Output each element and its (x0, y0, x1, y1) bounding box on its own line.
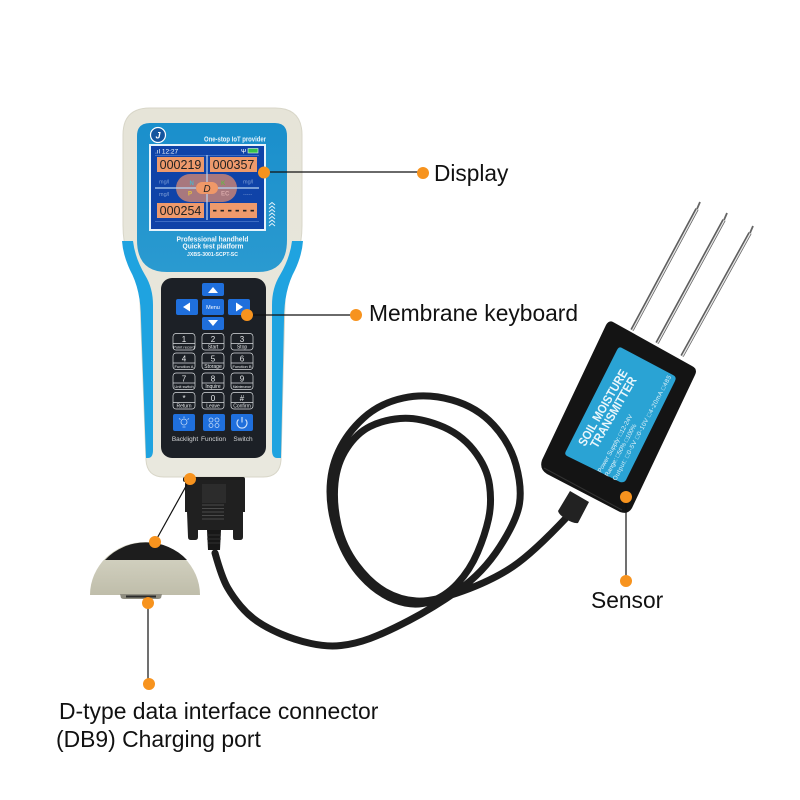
key legends: 1 (182, 335, 187, 344)
key legends: Function A (175, 364, 194, 369)
key legends: 0 (211, 394, 216, 403)
sensor title: TRANSMITTER (587, 374, 640, 450)
callout: membrane keyboard: Membrane keyboard (369, 300, 578, 326)
platform text: JXBS-3001-SCPT-SC (187, 252, 238, 258)
blue face panel (137, 123, 287, 272)
screen: .ıl 12:27 (155, 148, 179, 156)
number keys (173, 334, 253, 409)
screen: mg/l (243, 180, 253, 186)
key legends: Stop (237, 344, 247, 350)
screen: N (190, 181, 194, 187)
platform text (176, 234, 249, 258)
callout: membrane keyboard (241, 300, 578, 326)
platform text: Professional handheld (176, 234, 249, 244)
screen: EC (221, 192, 230, 198)
device body (123, 108, 302, 477)
connector detail inset (90, 542, 200, 599)
screen: mg/l (159, 192, 169, 198)
platform text: Quick test platform (182, 242, 244, 250)
key legends: Maintenance (233, 385, 251, 389)
key legends: Point record (173, 344, 195, 350)
screen: 000219 (160, 158, 201, 172)
callout: sensor (591, 491, 664, 613)
function keys: Backlight (172, 436, 198, 443)
function keys: Function (201, 436, 226, 443)
navigation keys (176, 283, 250, 330)
sensor title: SOIL MOISTURE (575, 367, 631, 448)
sensor label (565, 347, 676, 482)
strain relief (558, 491, 589, 523)
callout: sensor: Sensor (591, 587, 664, 613)
key legends: * (182, 394, 186, 403)
key legends: Return (176, 404, 192, 410)
handheld device (122, 108, 303, 477)
DB9 connector (183, 477, 245, 550)
key legends: Start (208, 344, 219, 350)
readings (157, 157, 204, 172)
callout: D-type data interface connector (56, 597, 379, 752)
key legends: Leave (206, 404, 220, 410)
key legends: 5 (211, 354, 216, 364)
function keys: Switch (233, 436, 253, 443)
sensor specs: Power Supply: □12-24V (597, 413, 635, 474)
callout: D-type data interface connector: D-type data interface connector (59, 698, 379, 724)
screen: ------ (212, 202, 254, 218)
screen: ----- (243, 192, 252, 198)
key legends: 4 (182, 354, 187, 364)
screen: 000254 (160, 204, 201, 218)
key legends: 3 (240, 335, 245, 344)
callout: connector leader (149, 473, 196, 548)
chevrons (269, 202, 275, 226)
sensor specs: Output: □0-5V □0-10V □4-20mA □485 (612, 374, 673, 482)
sensor housing (541, 321, 696, 513)
membrane keyboard (161, 278, 266, 458)
key legends: # (240, 394, 245, 403)
key legends: 8 (211, 374, 216, 384)
screen: P (188, 192, 192, 198)
navigation keys: Menu (206, 305, 220, 311)
key legends: Function B (232, 364, 252, 369)
callout: display (258, 160, 509, 186)
key legends: 6 (240, 354, 245, 364)
logo: J (155, 130, 161, 140)
key legends: 2 (211, 335, 216, 344)
screen: Ψ (241, 148, 246, 156)
callout: display: Display (434, 160, 509, 186)
screen: 000357 (213, 158, 254, 172)
key legends: Unit switch (174, 384, 194, 389)
key legends: Confirm (233, 404, 251, 410)
key legends: Inquire (205, 384, 221, 390)
function keys (172, 414, 253, 443)
callout: D-type data interface connector: (DB9) Charging port (56, 726, 261, 752)
key legends (173, 335, 252, 410)
screen: D (203, 184, 211, 195)
slogan: One-stop IoT provider (204, 136, 266, 144)
right blue grip (272, 241, 303, 458)
probes (632, 202, 753, 356)
unit labels: mg/l (159, 180, 169, 186)
left blue grip (122, 241, 153, 458)
cable (215, 396, 567, 646)
screen: K (221, 181, 226, 187)
center pill (176, 174, 237, 202)
screen (149, 144, 266, 231)
key legends: 9 (240, 374, 245, 384)
sensor specs: Range: □50% □100% (604, 422, 639, 478)
logo (150, 128, 166, 142)
key legends: 7 (182, 374, 187, 384)
key legends: Storage (204, 364, 222, 370)
sensor (541, 202, 753, 523)
